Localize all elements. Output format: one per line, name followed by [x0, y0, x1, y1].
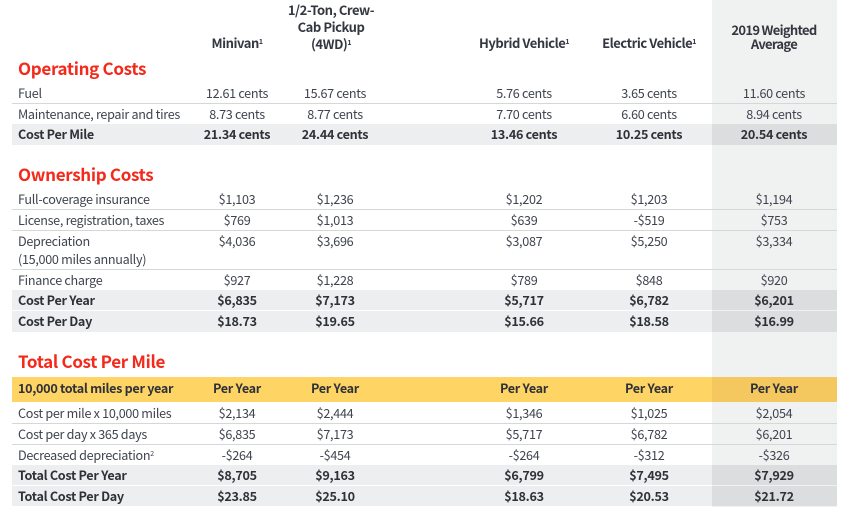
row: cost per mile x 10,000 — [12, 403, 836, 424]
row: cost per year: $6,782 — [629, 290, 669, 309]
row: cost per mile — [12, 124, 836, 144]
row: depreciation: $3,334 — [756, 231, 792, 250]
row: finance charge: $927 — [224, 270, 250, 289]
header: pickup: (4WD)1 — [311, 34, 351, 53]
row: cost per year: $6,835 — [217, 290, 257, 309]
row: finance charge: Finance charge — [18, 270, 102, 289]
row: insurance: $1,194 — [756, 189, 792, 208]
row: finance charge — [18, 270, 788, 289]
row: cost per mile: 20.54 cents — [741, 124, 807, 143]
row: license: $639 — [511, 210, 537, 229]
row: decreased depreciation: -$326 — [759, 445, 789, 464]
row: insurance: $1,103 — [219, 189, 255, 208]
row: cost per day x 365: $6,835 — [219, 424, 255, 443]
row: total cost per year: $7,929 — [754, 465, 794, 484]
row: cost per mile: 24.44 cents — [302, 124, 368, 143]
row: cost per mile x 10,000: $2,444 — [317, 403, 353, 422]
row: total cost per year: $9,163 — [315, 465, 355, 484]
row: insurance: Full-coverage insurance — [18, 189, 150, 208]
row: yellow header: 10,000 total miles per year — [18, 378, 173, 397]
row: license: $1,013 — [317, 210, 353, 229]
row: fuel: Fuel — [18, 83, 42, 102]
row: cost per day — [12, 311, 836, 332]
row: total cost per day: $21.72 — [754, 486, 794, 505]
row: fuel: 15.67 cents — [304, 83, 366, 102]
header: pickup: Cab Pickup — [298, 17, 364, 36]
row: total cost per year — [12, 465, 836, 485]
row: cost per day x 365 — [12, 424, 836, 445]
row: finance charge: $920 — [761, 270, 787, 289]
row: insurance: $1,236 — [317, 189, 353, 208]
row: cost per year: Cost Per Year — [18, 290, 95, 309]
heading: ownership costs: Ownership Costs — [18, 161, 153, 186]
row: depreciation: $4,036 — [219, 231, 255, 250]
row: finance charge: $848 — [636, 270, 662, 289]
row: cost per mile: Cost Per Mile — [18, 124, 94, 143]
row: license: $753 — [761, 210, 787, 229]
row: cost per year: $7,173 — [315, 290, 355, 309]
row: cost per mile x 10,000: Cost per mile x 10,000 miles — [18, 403, 171, 422]
header: weighted average: Average — [751, 34, 797, 52]
row: decreased depreciation: Decreased depreciation2 — [18, 445, 154, 464]
row: fuel — [12, 83, 836, 104]
row: cost per day x 365: Cost per day x 365 days — [18, 424, 147, 443]
header: electric: Electric Vehicle1 — [602, 33, 696, 52]
row: cost per day x 365: $6,201 — [756, 424, 792, 443]
row: total cost per day: $18.63 — [504, 486, 544, 505]
row: yellow header: Per Year — [500, 378, 548, 397]
row: cost per year: $6,201 — [754, 290, 794, 309]
row: total cost per day: $23.85 — [217, 486, 257, 505]
row: total cost per year: $7,495 — [629, 465, 669, 484]
row: depreciation: (15,000 miles annually) — [18, 249, 146, 268]
row: total cost per day — [12, 486, 836, 506]
row: yellow header: Per Year — [625, 378, 673, 397]
row: cost per mile x 10,000: $1,025 — [631, 403, 667, 422]
row: cost per year — [12, 290, 836, 310]
row: total cost per year: Total Cost Per Year — [18, 465, 127, 484]
row: maintenance — [18, 104, 802, 122]
row: depreciation — [12, 231, 836, 270]
header: weighted average — [731, 20, 817, 52]
row: yellow header — [12, 377, 836, 402]
row: depreciation: $3,087 — [506, 231, 542, 250]
row: cost per day x 365: $7,173 — [317, 424, 353, 443]
row: cost per day: $16.99 — [754, 311, 794, 330]
row: cost per mile x 10,000: $2,054 — [756, 403, 792, 422]
row: decreased depreciation: -$454 — [320, 445, 350, 464]
header: minivan: Minivan1 — [211, 33, 263, 52]
row: total cost per day: $25.10 — [315, 486, 355, 505]
row: yellow header: Per Year — [213, 378, 261, 397]
row: depreciation: Depreciation — [18, 231, 90, 250]
row: license — [12, 210, 836, 231]
row: insurance: $1,203 — [631, 189, 667, 208]
row: fuel: 3.65 cents — [621, 83, 677, 102]
row: maintenance: 8.73 cents — [209, 104, 265, 122]
header: weighted average: 2019 Weighted — [731, 20, 817, 38]
row: finance charge: $789 — [511, 270, 537, 289]
row: total cost per year: $8,705 — [217, 465, 257, 484]
header: hybrid: Hybrid Vehicle1 — [479, 33, 569, 52]
row: maintenance: 8.77 cents — [307, 104, 363, 122]
row: insurance: $1,202 — [506, 189, 542, 208]
row: license: License, registration, taxes — [18, 210, 164, 229]
row: total cost per day: $20.53 — [629, 486, 669, 505]
heading: operating costs: Operating Costs — [18, 55, 146, 80]
row: cost per mile x 10,000: $1,346 — [506, 403, 542, 422]
row: finance charge: $1,228 — [317, 270, 353, 289]
panel: operating costs — [12, 55, 837, 145]
row: decreased depreciation — [18, 445, 790, 464]
row: insurance — [12, 189, 836, 210]
row: cost per year: $5,717 — [504, 290, 544, 309]
row: maintenance: 7.70 cents — [496, 104, 552, 122]
row: maintenance: 6.60 cents — [621, 104, 677, 122]
column headers — [211, 0, 817, 53]
row: depreciation: $5,250 — [631, 231, 667, 250]
row: maintenance: 8.94 cents — [746, 104, 802, 122]
row: cost per day: $18.58 — [629, 311, 669, 330]
row: cost per day: $18.73 — [217, 311, 257, 330]
panel: ownership costs — [12, 161, 837, 332]
row: decreased depreciation: -$264 — [222, 445, 252, 464]
row: yellow header: Per Year — [311, 378, 359, 397]
row: fuel: 12.61 cents — [206, 83, 268, 102]
row: fuel: 5.76 cents — [496, 83, 552, 102]
row: fuel: 11.60 cents — [743, 83, 805, 102]
row: cost per day: Cost Per Day — [18, 311, 92, 330]
row: yellow header: Per Year — [750, 378, 798, 397]
row: total cost per day: Total Cost Per Day — [18, 486, 124, 505]
header: pickup: 1/2-Ton, Crew- — [288, 0, 374, 19]
heading: total cost per mile: Total Cost Per Mile — [18, 348, 165, 373]
row: license: -$519 — [634, 210, 664, 229]
row: total cost per year: $6,799 — [504, 465, 544, 484]
row: cost per day x 365: $5,717 — [506, 424, 542, 443]
row: decreased depreciation: -$264 — [509, 445, 539, 464]
row: cost per mile: 13.46 cents — [491, 124, 557, 143]
row: cost per mile: 21.34 cents — [204, 124, 270, 143]
row: depreciation: $3,696 — [317, 231, 353, 250]
panel: total cost per mile — [12, 348, 837, 506]
row: cost per day x 365: $6,782 — [631, 424, 667, 443]
row: cost per day: $15.66 — [504, 311, 544, 330]
row: cost per mile x 10,000: $2,134 — [219, 403, 255, 422]
row: maintenance: Maintenance, repair and tires — [18, 104, 180, 122]
header: pickup — [288, 0, 374, 53]
row: license: $769 — [224, 210, 250, 229]
row: cost per day: $19.65 — [315, 311, 355, 330]
row: decreased depreciation: -$312 — [634, 445, 664, 464]
weighted average column background — [712, 0, 836, 507]
row: cost per mile: 10.25 cents — [616, 124, 682, 143]
